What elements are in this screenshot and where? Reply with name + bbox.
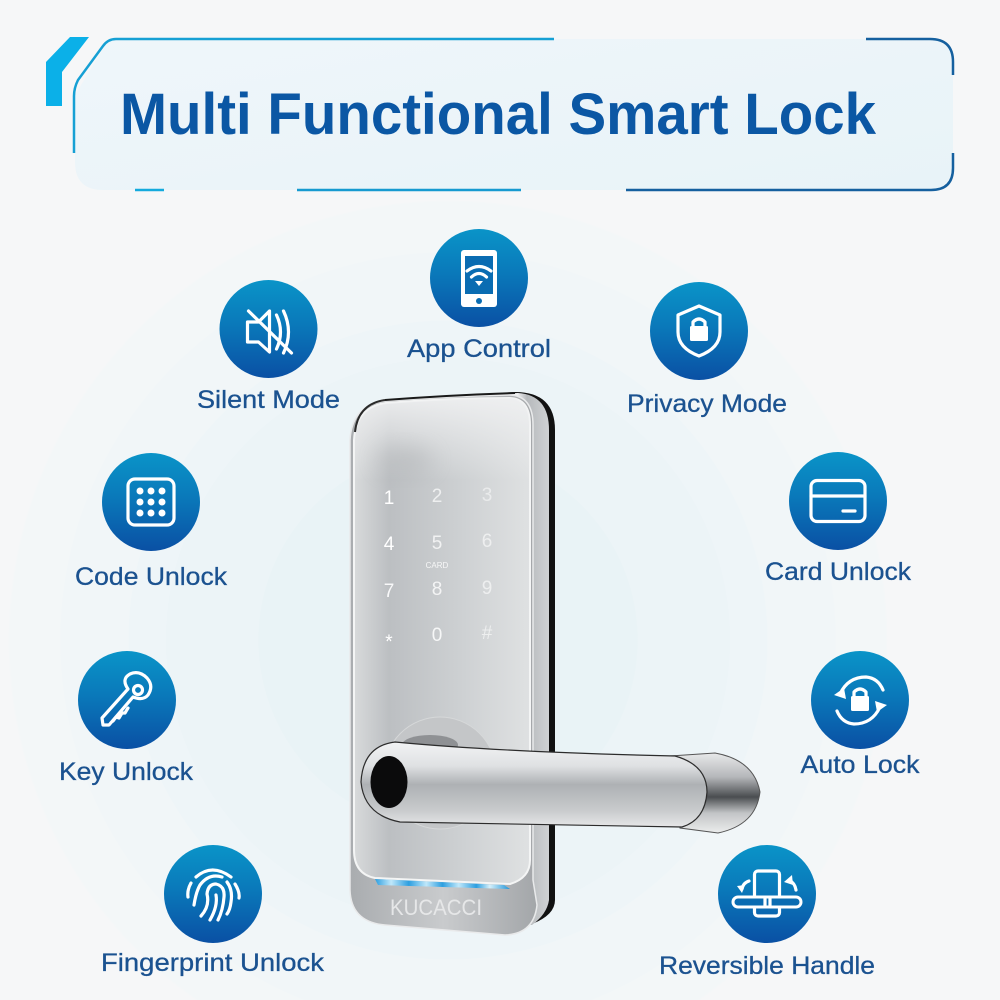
lock side bezel — [500, 393, 549, 925]
keypad digits: 2 — [432, 486, 442, 507]
icon: keypad — [128, 479, 174, 525]
LED light bar — [375, 879, 510, 889]
keypad digits: 6 — [482, 531, 492, 552]
keypad digits: 3 — [482, 485, 492, 506]
header banner — [46, 37, 953, 190]
keypad digits — [384, 485, 493, 653]
feature: Card Unlock — [765, 452, 912, 586]
handle rosette — [384, 717, 496, 829]
label: Fingerprint Unlock — [101, 949, 325, 977]
label: Card Unlock — [765, 558, 912, 586]
lock front face — [350, 395, 537, 935]
icon: phone with wifi — [461, 250, 497, 307]
icon: key — [102, 673, 151, 725]
icon: muted speaker — [248, 311, 292, 353]
keypad digits: * — [385, 632, 393, 653]
keypad digits: 0 — [432, 625, 442, 646]
keypad digits: 7 — [384, 581, 394, 602]
feature: Auto Lock — [800, 651, 920, 779]
keypad digits: 9 — [482, 578, 492, 599]
feature: Code Unlock — [75, 453, 228, 591]
banner frame lines — [74, 39, 953, 190]
label: Reversible Handle — [659, 952, 875, 980]
cyan corner accent — [46, 37, 89, 106]
keypad digits: CARD — [426, 561, 449, 570]
keypad digits: 8 — [432, 579, 442, 600]
icon: rotating arrows with padlock — [834, 677, 887, 724]
title: Multi Functional Smart Lock — [120, 82, 877, 147]
lock back plate — [500, 392, 555, 926]
label: Key Unlock — [59, 758, 194, 786]
handle lever — [361, 742, 707, 827]
fingerprint sensor — [370, 756, 408, 808]
banner panel — [75, 39, 953, 190]
label: Privacy Mode — [627, 390, 787, 418]
feature: Reversible Handle — [659, 845, 875, 980]
smart lock product — [350, 392, 760, 935]
icon: reversing handle — [733, 871, 801, 916]
handle tip — [670, 753, 760, 833]
icon: card — [811, 480, 865, 522]
keypad digits: 1 — [384, 488, 394, 509]
label: Auto Lock — [800, 751, 920, 779]
feature: Key Unlock — [59, 651, 194, 786]
feature: Privacy Mode — [627, 282, 787, 418]
label: Code Unlock — [75, 563, 228, 591]
keypad digits: 5 — [432, 533, 442, 554]
feature: App Control — [407, 229, 551, 363]
label: App Control — [407, 335, 551, 363]
feature: Silent Mode — [197, 280, 340, 414]
keypad digits: # — [482, 623, 493, 644]
icon: shield with padlock — [678, 306, 720, 356]
label: Silent Mode — [197, 386, 340, 414]
keypad digits: 4 — [384, 534, 395, 555]
brand name: KUCACCI — [390, 895, 482, 920]
icon: fingerprint — [188, 870, 239, 920]
feature: Fingerprint Unlock — [101, 845, 325, 977]
